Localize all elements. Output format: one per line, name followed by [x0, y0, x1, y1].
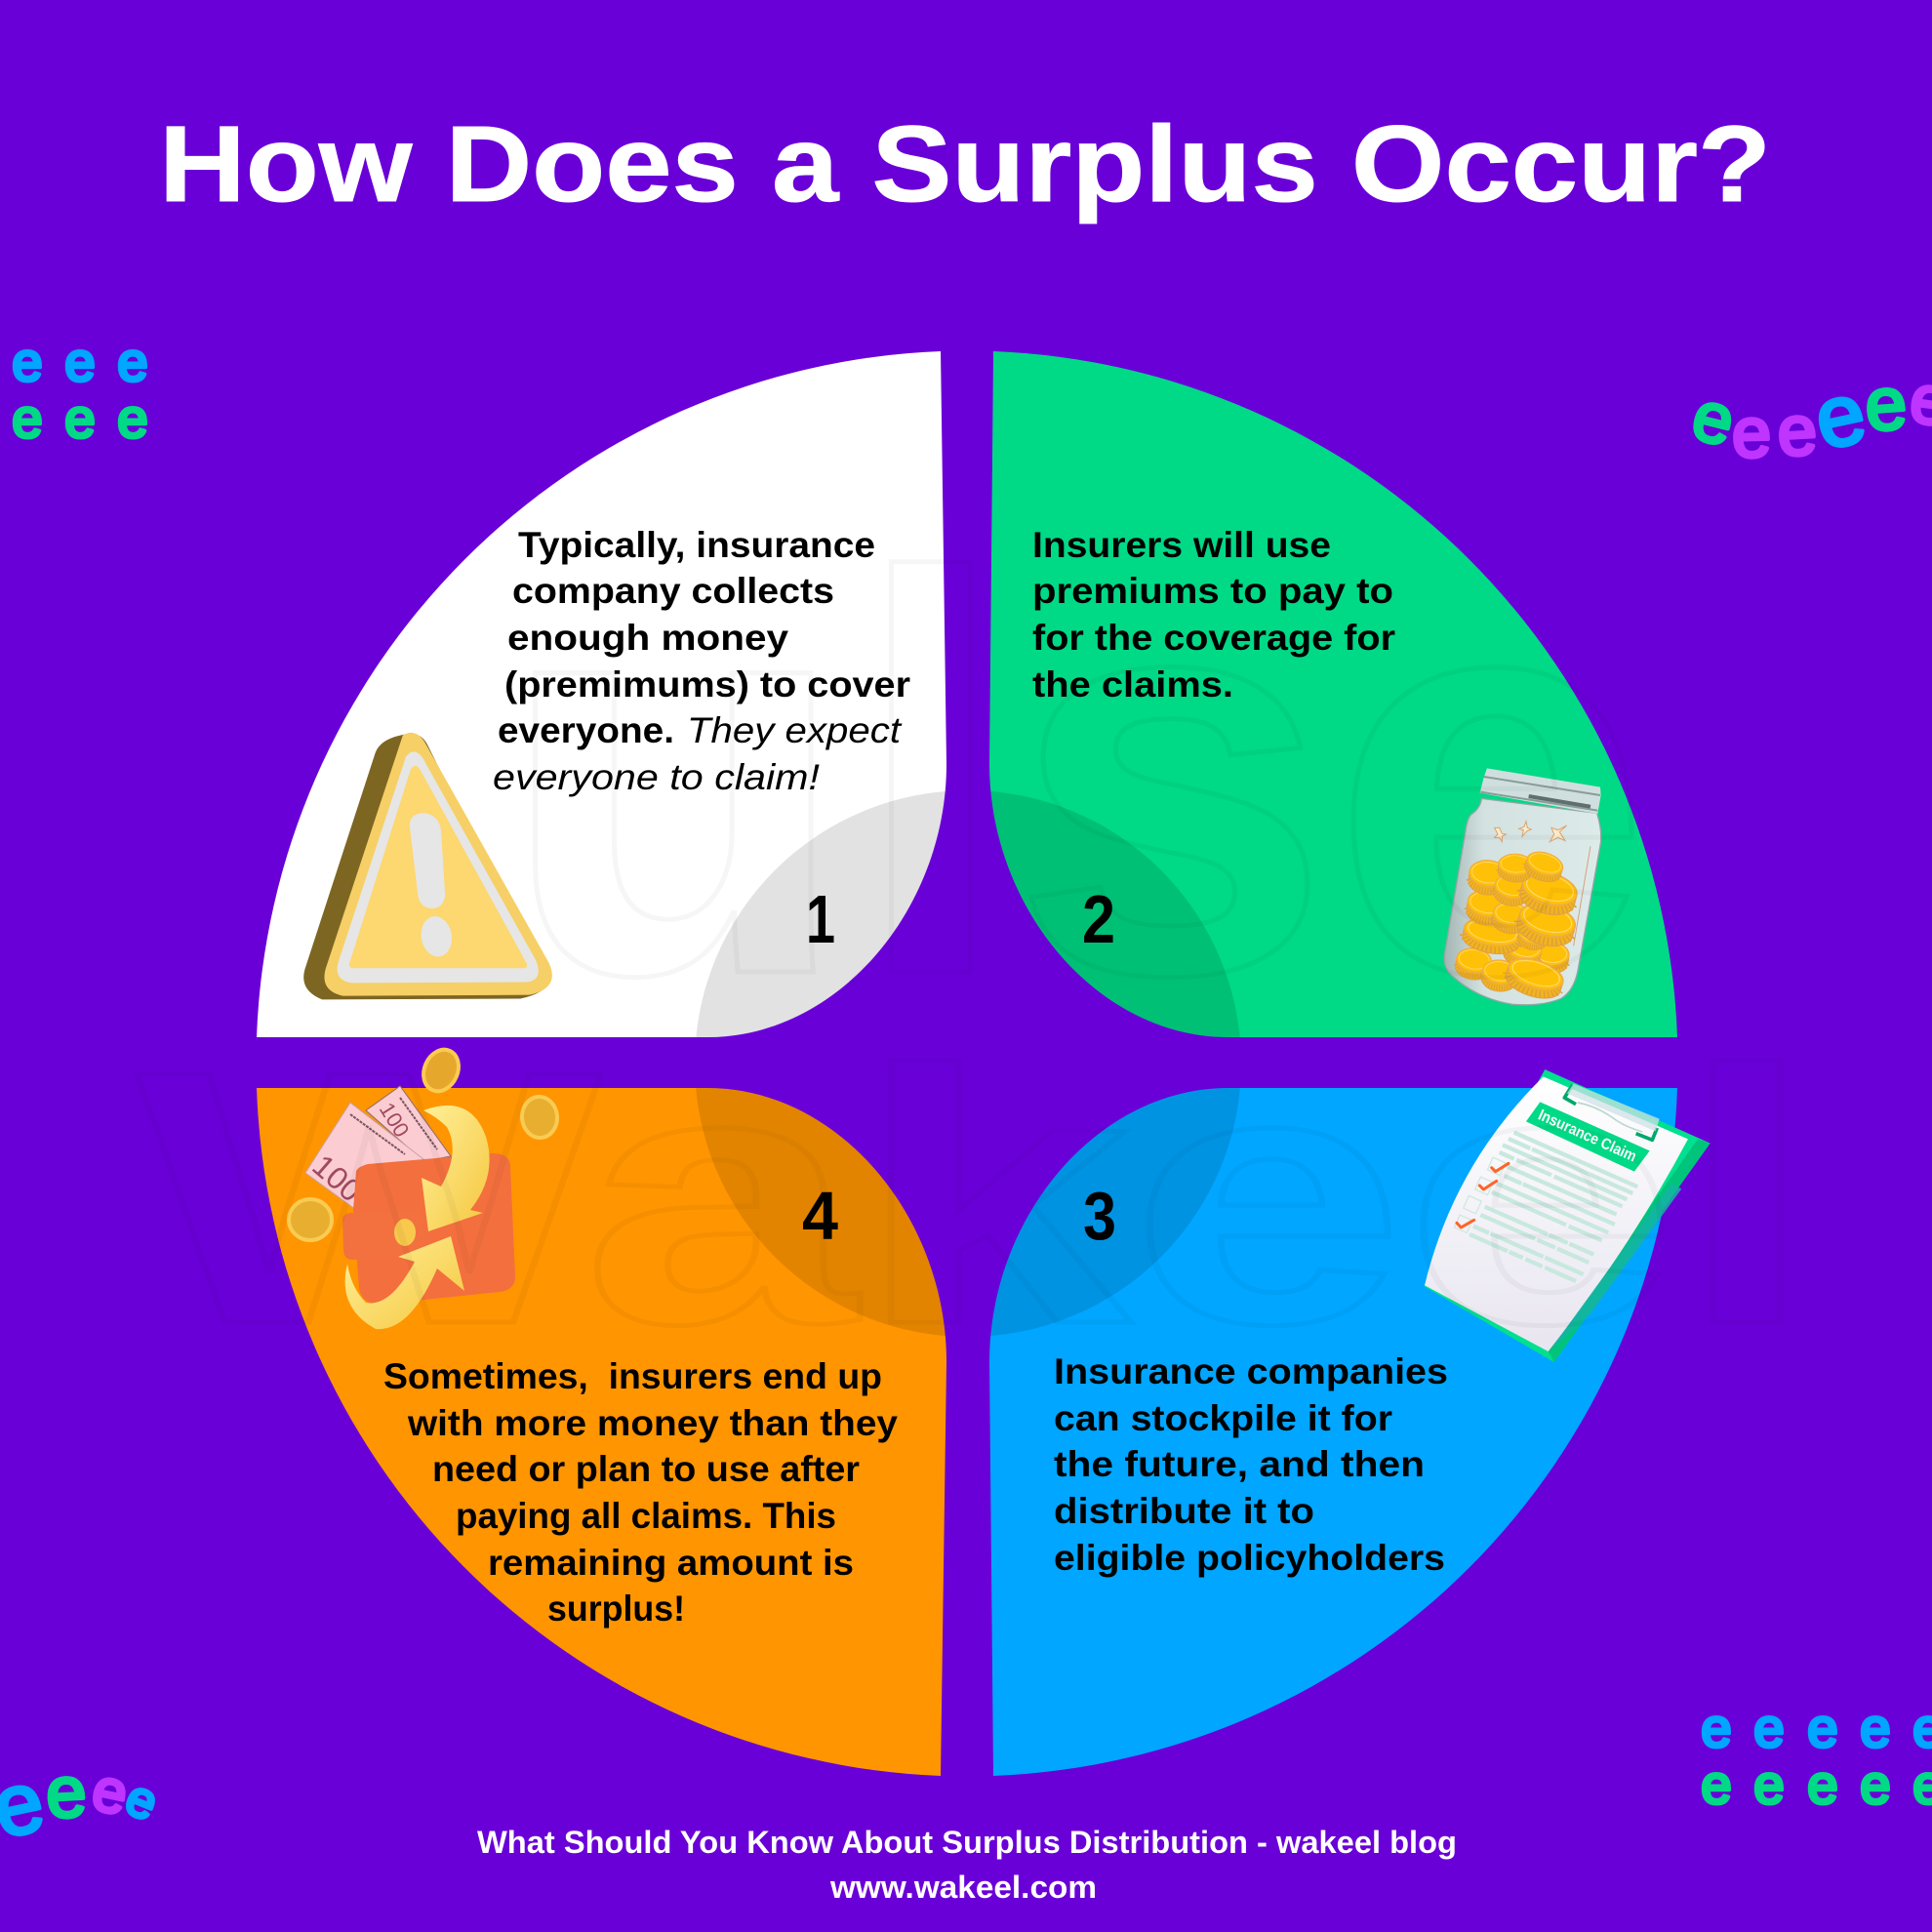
text block: step 2: Insurers will use — [1032, 525, 1331, 565]
decorative letters: top right wave: e — [1776, 391, 1819, 471]
decorative letters: top left grid: e — [12, 331, 43, 392]
decorative letters: top left grid: e — [64, 387, 96, 449]
decorative letters: bottom right grid: e — [1807, 1753, 1838, 1815]
text block: step 3 — [1054, 1351, 1448, 1578]
text block: step 4: remaining amount is — [488, 1543, 854, 1583]
panel 3: blue — [989, 1088, 1677, 1776]
text block: step 3: eligible policyholders — [1054, 1538, 1445, 1578]
text block: step 2: for the coverage for — [1032, 618, 1395, 658]
text block: step 1: everyone to claim! — [493, 757, 820, 797]
text block: step 1: (premimums) to cover — [504, 664, 910, 704]
decorative letters: top right wave: e — [1806, 363, 1873, 467]
text block: step 1 — [493, 525, 910, 797]
footer website: www.wakeel.com — [829, 1870, 1097, 1905]
decorative letters: top right wave: e — [1731, 394, 1772, 472]
title: How Does a Surplus Occur? — [159, 104, 1771, 224]
decorative letters: bottom right grid: e — [1701, 1697, 1732, 1758]
number 3: 3 — [1083, 1178, 1116, 1254]
decorative letters: top right wave: e — [1863, 362, 1910, 447]
decorative letters: bottom right grid: e — [1860, 1753, 1891, 1815]
central darker circle overlay — [695, 790, 1241, 1337]
icon: wallet with bills and coins: 100 — [375, 1098, 414, 1142]
panel 2: green — [989, 351, 1677, 1037]
text block: step 3: distribute it to — [1054, 1491, 1314, 1531]
footer source line: What Should You Know About Surplus Distribution - wakeel blog — [477, 1825, 1457, 1860]
decorative letters: top left grid: e — [117, 387, 148, 449]
text block: step 1: enough money — [507, 618, 788, 658]
decorative letters: top left grid: e — [64, 331, 96, 392]
text block: step 2: the claims. — [1032, 664, 1233, 704]
label: insurance claim: Insurance Claim — [1536, 1107, 1638, 1165]
decorative letters: bottom right grid: e — [1753, 1697, 1785, 1758]
decorative letters: bottom right grid: e — [1753, 1753, 1785, 1815]
icon: wallet with bills and coins: 100 — [305, 1147, 369, 1209]
decorative letters: top right wave: e — [1685, 376, 1742, 462]
decorative letters: bottom right grid: e — [1807, 1697, 1838, 1758]
watermark: Wakeel — [137, 996, 1815, 1399]
text block: step 4: paying all claims. This — [456, 1496, 836, 1536]
panel 4: orange — [257, 1088, 946, 1776]
number 4: 4 — [802, 1178, 838, 1254]
decorative letters: bottom left wave: e — [44, 1751, 88, 1833]
number 1: 1 — [806, 881, 835, 957]
decorative letters: bottom right grid: e — [1701, 1753, 1732, 1815]
icon: warning triangle — [303, 733, 552, 999]
decorative letters: top right wave — [1685, 360, 1932, 472]
text block: step 2: premiums to pay to — [1032, 571, 1393, 611]
text block: step 4: Sometimes, insurers end up — [383, 1356, 882, 1396]
text block: step 4: surplus! — [547, 1589, 685, 1629]
text block: step 1: They expect — [687, 710, 903, 750]
text block: step 3: can stockpile it for — [1054, 1398, 1392, 1438]
icon: jar of coins — [1444, 768, 1601, 1005]
decorative letters: top left grid: e — [117, 331, 148, 392]
decorative letters: bottom right grid: e — [1860, 1697, 1891, 1758]
watermark: ulse — [500, 460, 1651, 1092]
icon: wallet with bills and coins — [289, 1044, 559, 1329]
decorative letters: top left grid — [12, 331, 148, 449]
text block: step 3: Insurance companies — [1054, 1351, 1448, 1391]
text block: step 1: Typically, insurance — [518, 525, 875, 565]
watermark — [137, 460, 1815, 1399]
decorative letters: bottom right grid — [1701, 1697, 1932, 1815]
number 2: 2 — [1082, 881, 1115, 957]
icon: insurance claim clipboard — [1424, 1069, 1711, 1362]
text block: step 3: the future, and then — [1054, 1444, 1425, 1484]
decorative letters: bottom left wave — [0, 1751, 165, 1856]
text block: step 1: everyone. — [498, 710, 674, 750]
decorative letters: bottom left wave: e — [87, 1755, 134, 1829]
decorative letters: bottom left wave: e — [118, 1769, 165, 1832]
text block: step 1: company collects — [512, 571, 834, 611]
text block: step 4 — [383, 1356, 898, 1629]
text block: step 4: with more money than they — [407, 1403, 898, 1443]
decorative letters: top left grid: e — [12, 387, 43, 449]
panel 1: white — [257, 351, 946, 1037]
text block: step 2 — [1032, 525, 1395, 704]
text block: step 4: need or plan to use after — [432, 1449, 860, 1489]
